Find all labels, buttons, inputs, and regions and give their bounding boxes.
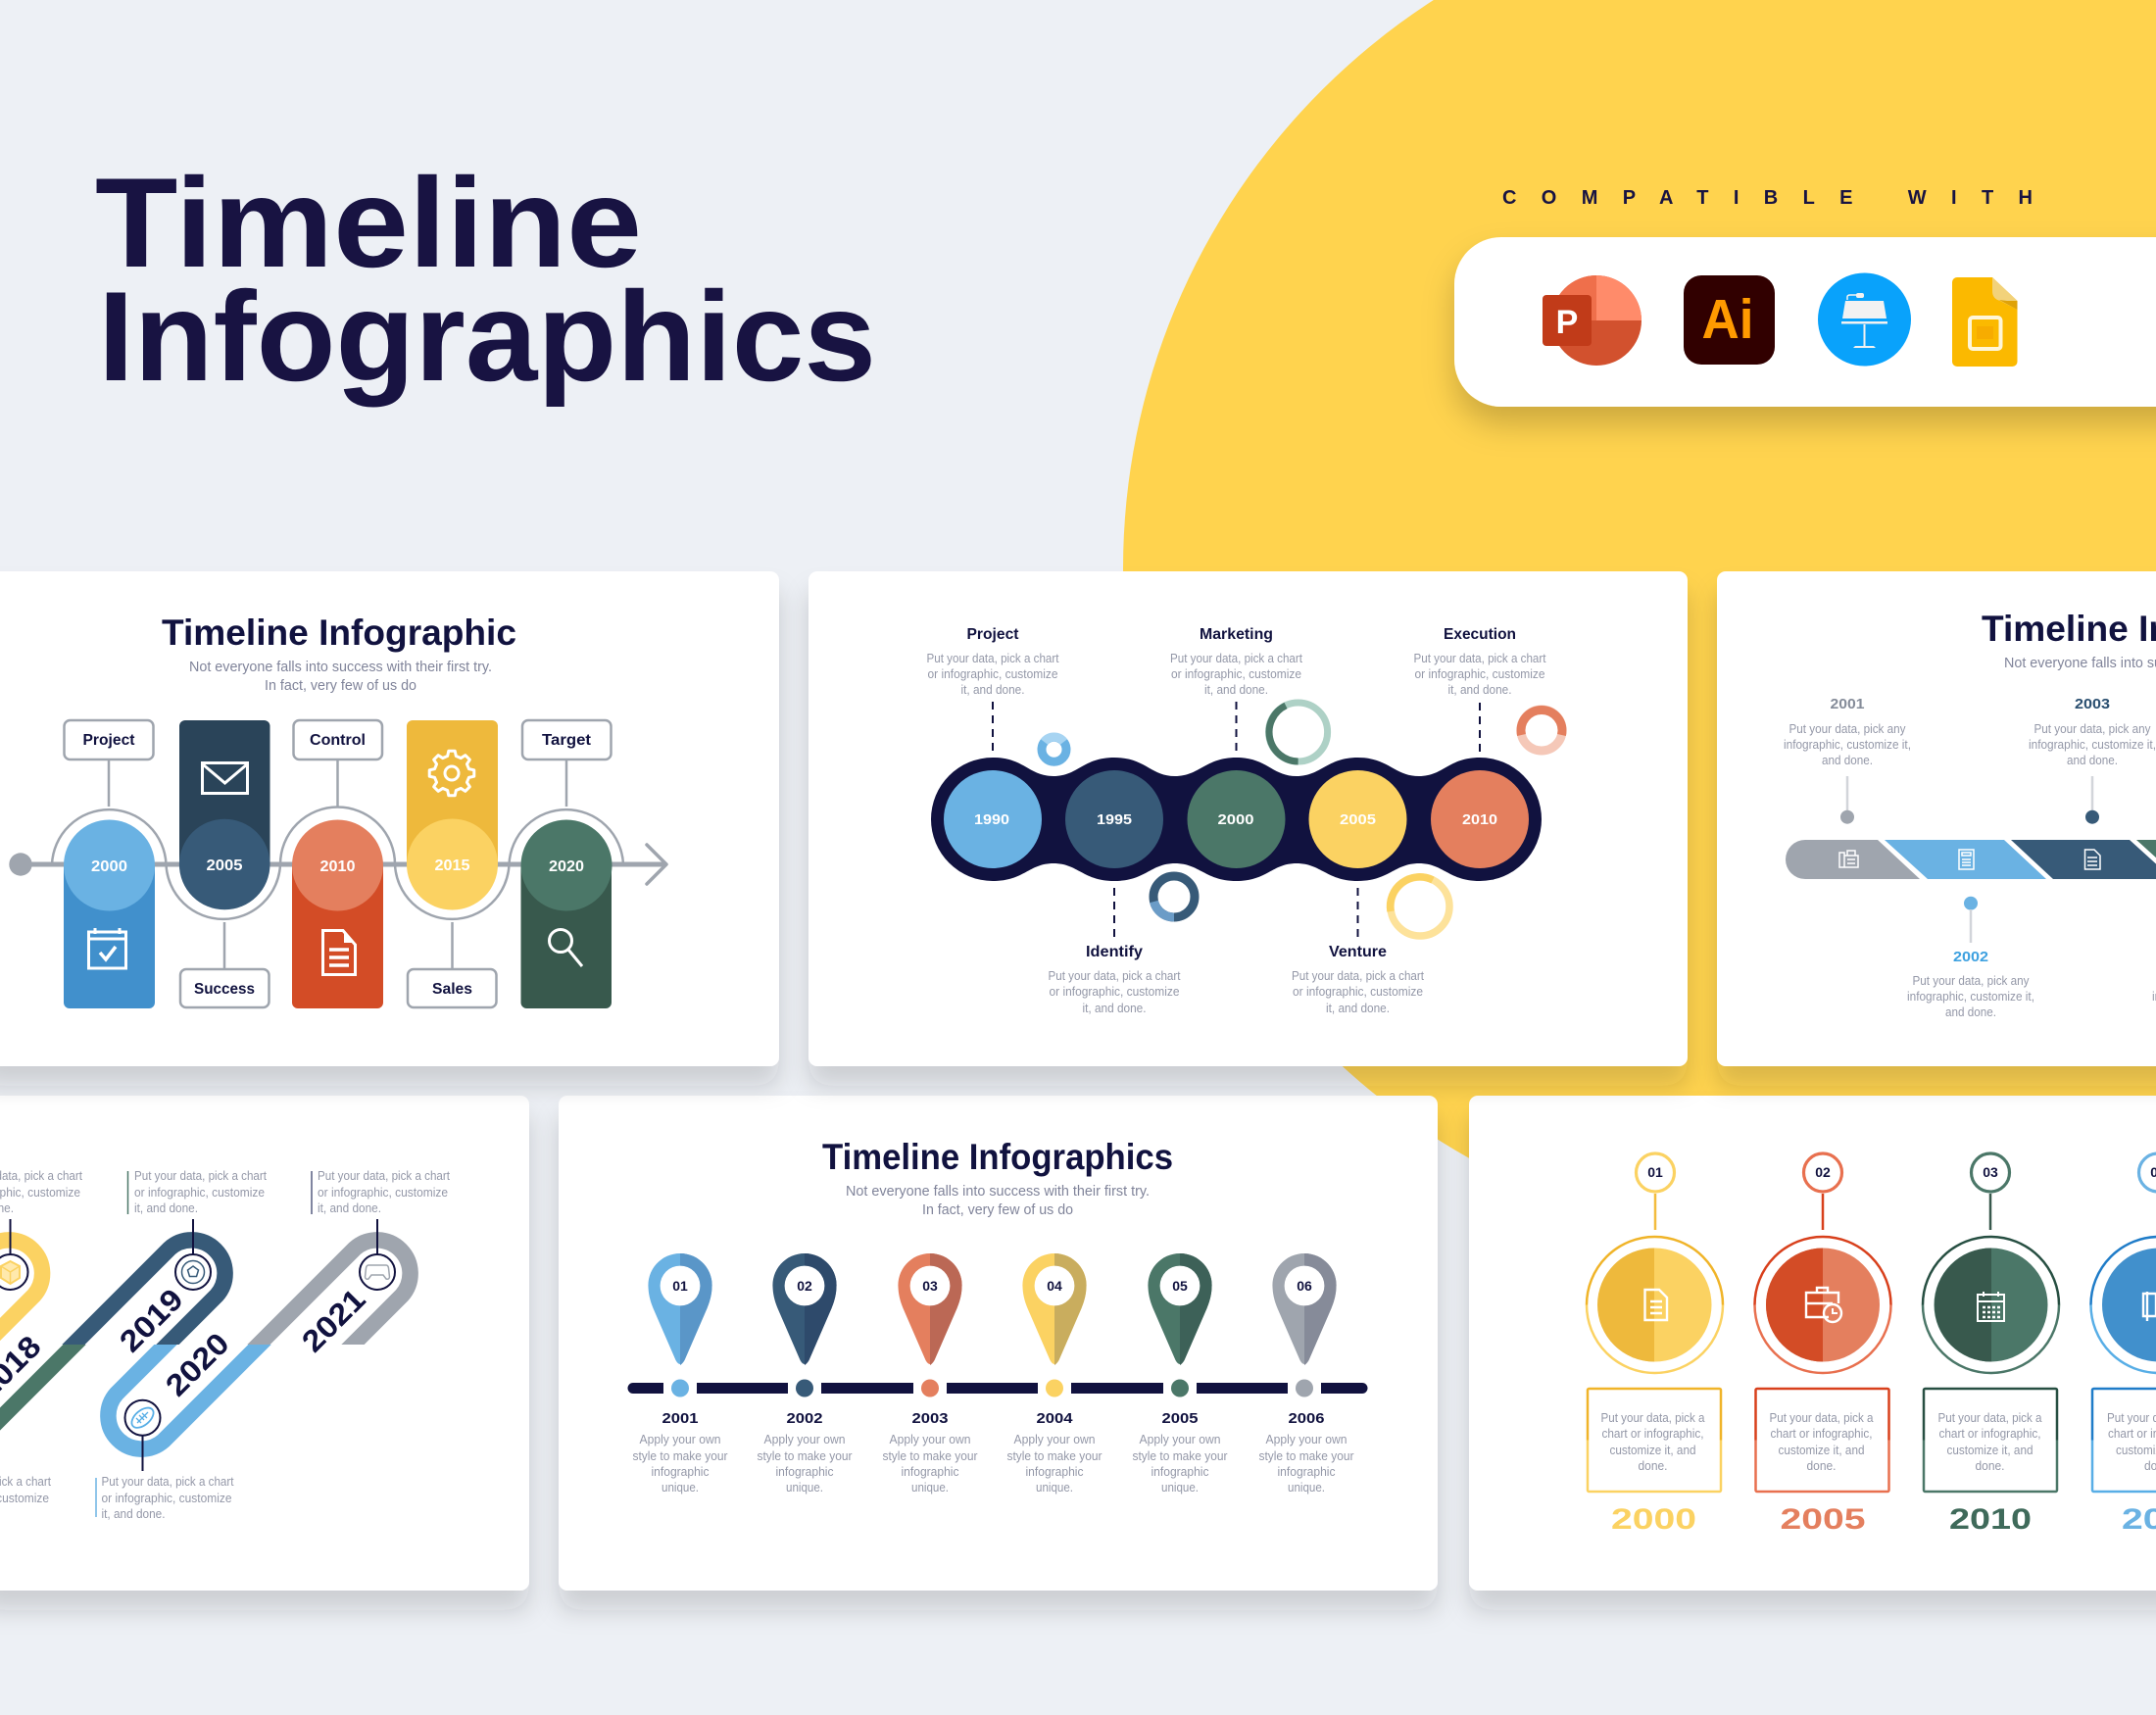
year labels: 2019 xyxy=(113,1282,190,1359)
pin 03: style to make your xyxy=(882,1449,978,1463)
pin 02: Apply your own xyxy=(764,1433,846,1446)
heading: Timeline Infographics xyxy=(822,1137,1173,1177)
label: Project xyxy=(65,720,153,807)
milestone 2002: infographic, customize it, xyxy=(1907,990,2034,1004)
node 2005 xyxy=(1309,770,1407,868)
pin 01 xyxy=(633,1253,727,1494)
pin 01: unique. xyxy=(662,1481,699,1494)
main title: Infographics xyxy=(98,265,876,408)
panel: blob timeline xyxy=(808,571,1688,1066)
icon: document xyxy=(2085,850,2100,869)
node 1995 xyxy=(1065,770,1163,868)
card 03 xyxy=(1923,1153,2059,1536)
text: 2021: or infographic, customize xyxy=(318,1186,448,1200)
label: Project: it, and done. xyxy=(960,683,1025,697)
text: 2019: Put your data, pick a chart xyxy=(134,1169,267,1183)
axis with arrow xyxy=(9,845,666,884)
pin 01: 01 xyxy=(672,1278,688,1294)
pill 2015: 2015 xyxy=(435,858,470,874)
band: 2021 gray xyxy=(239,1240,411,1364)
text: 2021: it, and done. xyxy=(318,1201,381,1215)
node 2005: 2005 xyxy=(1340,811,1376,828)
node: 2020 football xyxy=(125,1400,161,1471)
yellow background circle xyxy=(1123,0,2156,1247)
subheading: Not everyone falls into success with their first try. xyxy=(846,1183,1150,1200)
label: Execution: or infographic, customize xyxy=(1415,667,1545,681)
label: Control: Control xyxy=(310,732,366,749)
card 01 xyxy=(1587,1153,1723,1536)
pin 03 xyxy=(882,1253,978,1494)
label: Project: Project xyxy=(966,626,1019,643)
panel: compatible apps xyxy=(1454,237,2156,407)
label: Venture xyxy=(1292,888,1424,1015)
pin 05: style to make your xyxy=(1133,1449,1227,1463)
main title xyxy=(95,151,876,408)
label: Project: Project xyxy=(82,732,135,749)
pill 2010: 2010 xyxy=(319,858,355,875)
label: Identify xyxy=(1049,888,1181,1015)
pin 01: Apply your own xyxy=(639,1433,721,1446)
panel: pill timeline xyxy=(0,571,779,1066)
pin 06: 06 xyxy=(1297,1278,1312,1294)
card 01: chart or infographic, xyxy=(1601,1427,1703,1441)
panel: diagonal timeline xyxy=(0,1096,529,1591)
label: Marketing: Marketing xyxy=(1200,626,1273,643)
node: 2021 gamepad xyxy=(360,1219,395,1290)
donut: navy xyxy=(1153,876,1195,917)
panel: ribbon timeline xyxy=(1717,571,2156,1066)
pin 06: unique. xyxy=(1288,1481,1325,1494)
subheading: Not everyone falls into success with their first try. xyxy=(189,659,492,675)
pin 05: Apply your own xyxy=(1139,1433,1221,1446)
pin 03: unique. xyxy=(911,1481,949,1494)
label: Project: Put your data, pick a chart xyxy=(927,652,1059,665)
label: Identify: or infographic, customize xyxy=(1049,985,1180,999)
card 03: chart or infographic, xyxy=(1938,1427,2040,1441)
label: Identify: it, and done. xyxy=(1082,1002,1147,1015)
pin 03: infographic xyxy=(902,1465,958,1479)
node 1990 xyxy=(944,770,1042,868)
card 03: 2010 xyxy=(1949,1503,2032,1536)
card 03: done. xyxy=(1976,1459,2005,1473)
milestone 2001: infographic, customize it, xyxy=(1784,738,1911,752)
pin 04: style to make your xyxy=(1007,1449,1102,1463)
pin 04: 2004 xyxy=(1037,1410,1073,1427)
text: 2020: it, and done. xyxy=(102,1507,165,1521)
text: 2021 xyxy=(312,1169,450,1215)
pin 04: 04 xyxy=(1047,1278,1062,1294)
ribbon xyxy=(1786,840,2156,879)
pin 06: infographic xyxy=(1278,1465,1335,1479)
pin 05: 2005 xyxy=(1162,1410,1198,1427)
heading: Timeline Infographic xyxy=(162,612,516,653)
pin 01: 2001 xyxy=(662,1410,698,1427)
label: Execution: Execution xyxy=(1444,626,1516,643)
node 2000: 2000 xyxy=(1217,811,1254,828)
label: Execution: Put your data, pick a chart xyxy=(1413,652,1546,665)
pill 2005 xyxy=(179,720,270,909)
node 1995: 1995 xyxy=(1097,811,1132,828)
wave outline xyxy=(52,808,623,919)
text: 2020 xyxy=(96,1475,234,1521)
node 2000 xyxy=(1188,770,1286,868)
pin 02: unique. xyxy=(786,1481,823,1494)
panel: circle cards xyxy=(1469,1096,2156,1591)
card 01: Put your data, pick a xyxy=(1601,1411,1705,1425)
main title: Timeline xyxy=(95,151,642,294)
pin 04: Apply your own xyxy=(1013,1433,1096,1446)
pill 2010 xyxy=(292,819,383,1008)
year labels: 2020 xyxy=(159,1326,236,1403)
pin 06: style to make your xyxy=(1258,1449,1354,1463)
year labels: 2021 xyxy=(295,1282,372,1359)
year labels xyxy=(0,1282,372,1406)
pin 06: 2006 xyxy=(1288,1410,1325,1427)
milestone 2003: Put your data, pick any xyxy=(2034,722,2151,736)
label: Identify: Put your data, pick a chart xyxy=(1049,969,1181,983)
card 02: 02 xyxy=(1815,1164,1831,1180)
pin 02: infographic xyxy=(776,1465,833,1479)
subheading xyxy=(846,1183,1150,1218)
label: Execution: it, and done. xyxy=(1448,683,1511,697)
pin 02: 02 xyxy=(797,1278,812,1294)
text: 2018 xyxy=(0,1169,82,1215)
label: Execution xyxy=(1413,626,1546,753)
icon: Illustrator: Ai xyxy=(1701,288,1754,351)
milestone 2003: and done. xyxy=(2067,754,2118,767)
pill 2000: 2000 xyxy=(91,858,127,875)
card 03: Put your data, pick a xyxy=(1938,1411,2042,1425)
label: Success: Success xyxy=(194,981,255,998)
label: Marketing: it, and done. xyxy=(1204,683,1268,697)
text: 2019 xyxy=(127,1169,267,1215)
card 02: Put your data, pick a xyxy=(1770,1411,1874,1425)
icon: fax xyxy=(1839,851,1858,867)
milestone 2002: and done. xyxy=(1945,1005,1996,1019)
node 1990: 1990 xyxy=(974,811,1009,828)
pin 01: style to make your xyxy=(633,1449,727,1463)
subheading: In fact, very few of us do xyxy=(922,1201,1073,1218)
donut: orange xyxy=(1521,710,1562,751)
card 01: 2000 xyxy=(1611,1503,1696,1536)
pin 02: 2002 xyxy=(786,1410,823,1427)
pin 03: 2003 xyxy=(911,1410,949,1427)
card 01: 01 xyxy=(1647,1164,1663,1180)
milestone 2003 xyxy=(2029,696,2156,824)
milestone 2001: and done. xyxy=(1822,754,1873,767)
label: Identify: Identify xyxy=(1086,944,1143,960)
text: lower left xyxy=(0,1475,51,1505)
node: 2018 dice xyxy=(0,1219,27,1290)
pin 05: unique. xyxy=(1161,1481,1199,1494)
band: green xyxy=(0,1345,86,1431)
pin 01: infographic xyxy=(651,1465,710,1479)
card 02: customize it, and xyxy=(1778,1444,1865,1457)
card 03: customize it, and xyxy=(1946,1444,2034,1457)
band: 2018 yellow xyxy=(0,1240,42,1368)
label: Sales: Sales xyxy=(432,981,472,998)
band: 2019 navy xyxy=(54,1240,225,1364)
milestone 2001: 2001 xyxy=(1831,696,1864,712)
text: 2020: or infographic, customize xyxy=(102,1492,232,1505)
card 01: customize it, and xyxy=(1609,1444,1696,1457)
pill 2000 xyxy=(64,819,155,1008)
icon: PowerPoint xyxy=(1543,275,1642,366)
timeline bar xyxy=(633,1383,1362,1394)
pin 06 xyxy=(1258,1253,1354,1494)
pin 03: Apply your own xyxy=(890,1433,971,1446)
pin 06: Apply your own xyxy=(1266,1433,1348,1446)
donut: yellow xyxy=(1391,877,1449,936)
subheading: In fact, very few of us do xyxy=(265,677,416,694)
band: 2020 blue xyxy=(108,1324,279,1449)
node 2010: 2010 xyxy=(1462,811,1497,828)
donut: blue xyxy=(1042,737,1066,761)
milestone 2002 xyxy=(1907,897,2034,1019)
card 02: chart or infographic, xyxy=(1770,1427,1872,1441)
card 01: done. xyxy=(1639,1459,1668,1473)
pin 03: 03 xyxy=(922,1278,938,1294)
label: Target xyxy=(522,720,612,807)
pill 2005: 2005 xyxy=(206,858,243,874)
label: Venture: it, and done. xyxy=(1326,1002,1390,1015)
label: Venture: Venture xyxy=(1329,944,1387,960)
icon: calculator xyxy=(1959,850,1974,869)
compatible with heading: COMPATIBLE WITH xyxy=(1502,187,2033,209)
pill 2020 xyxy=(521,819,612,1008)
text: 2021: Put your data, pick a chart xyxy=(318,1169,450,1183)
milestone 2002: 2002 xyxy=(1953,949,1988,965)
icon: Keynote xyxy=(1818,272,1911,367)
card 02: done. xyxy=(1807,1459,1837,1473)
text: 2020: Put your data, pick a chart xyxy=(102,1475,234,1489)
node: 2019 soccer ball xyxy=(175,1219,211,1290)
pin 05 xyxy=(1133,1253,1227,1494)
label: Sales xyxy=(408,922,496,1007)
label: Marketing xyxy=(1170,626,1302,752)
card 02: 2005 xyxy=(1780,1503,1866,1536)
pin 04: infographic xyxy=(1025,1465,1084,1479)
pin 05: infographic xyxy=(1151,1465,1209,1479)
label: Project: or infographic, customize xyxy=(927,667,1058,681)
pin 02 xyxy=(757,1253,853,1494)
label: Target: Target xyxy=(542,732,592,749)
panel: pin timeline xyxy=(559,1096,1438,1591)
label: Venture: Put your data, pick a chart xyxy=(1292,969,1424,983)
label: Marketing: or infographic, customize xyxy=(1171,667,1301,681)
pin 04: unique. xyxy=(1036,1481,1073,1494)
milestone 2001 xyxy=(1784,696,1911,824)
pin 05: 05 xyxy=(1172,1278,1188,1294)
label: Project xyxy=(927,626,1059,752)
pin 04 xyxy=(1007,1253,1102,1494)
icon: PowerPoint: P xyxy=(1556,304,1578,341)
card 04 xyxy=(2091,1153,2156,1536)
pill 2020: 2020 xyxy=(549,858,584,875)
icon: Google Slides xyxy=(1952,277,2017,367)
pin 02: style to make your xyxy=(757,1449,853,1463)
card 02 xyxy=(1754,1153,1891,1536)
blob background xyxy=(931,758,1542,881)
label: Venture: or infographic, customize xyxy=(1293,985,1423,999)
subheading xyxy=(189,659,492,694)
milestone 2003: 2003 xyxy=(2075,696,2110,712)
donut: green xyxy=(1269,703,1328,761)
label: Control xyxy=(294,720,382,807)
icon: Illustrator xyxy=(1684,275,1775,365)
node 2010 xyxy=(1431,770,1529,868)
card 03: 03 xyxy=(1983,1164,1998,1180)
milestone 2001: Put your data, pick any xyxy=(1789,722,1906,736)
pill 2015 xyxy=(407,720,498,909)
text: 2019: it, and done. xyxy=(134,1201,198,1215)
label: Marketing: Put your data, pick a chart xyxy=(1170,652,1302,665)
text: 2019: or infographic, customize xyxy=(134,1186,265,1200)
label: Success xyxy=(180,922,269,1007)
milestone 2002: Put your data, pick any xyxy=(1913,974,2030,988)
